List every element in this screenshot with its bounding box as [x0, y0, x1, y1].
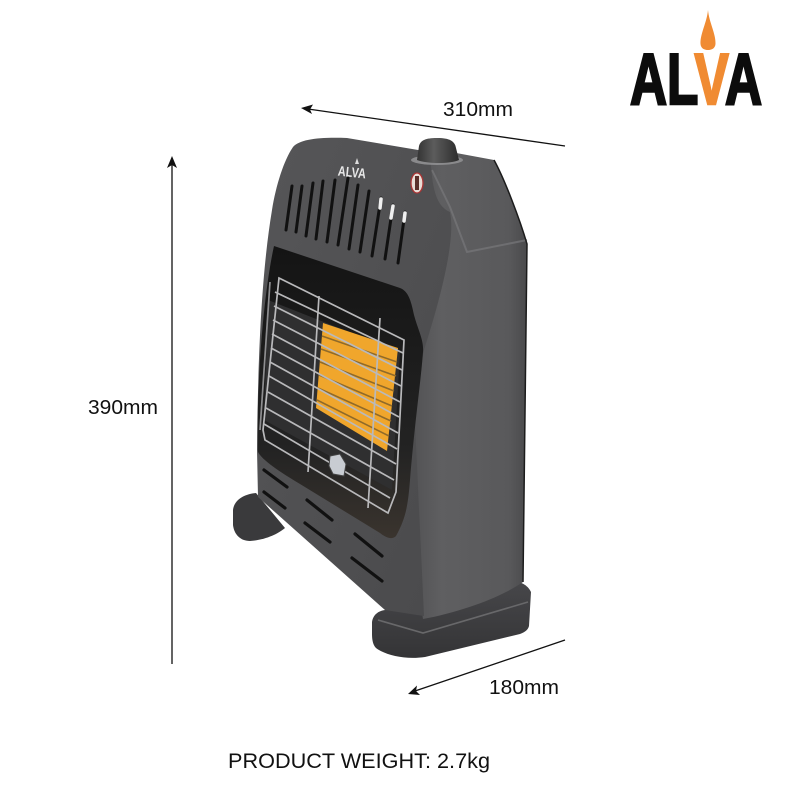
wire grill — [260, 278, 404, 513]
vent highlights — [380, 199, 405, 221]
side bevel highlight — [432, 170, 527, 252]
grill frame — [263, 278, 404, 513]
depth dimension arrow — [408, 640, 565, 695]
width label: 310mm — [443, 99, 513, 121]
width dimension arrow — [301, 104, 565, 146]
body front panel — [257, 138, 451, 616]
right foot base — [372, 581, 531, 658]
dark window frame — [258, 246, 423, 538]
burner fitting — [329, 454, 346, 476]
window inner reflection — [264, 300, 400, 490]
logo: ALVA — [630, 10, 762, 120]
logo wordmark: ALVA — [630, 40, 762, 120]
warning badge — [411, 173, 423, 193]
top logo: ALVA — [337, 163, 367, 181]
ceramic panel ribs — [317, 336, 397, 436]
height label: 390mm — [88, 397, 158, 419]
depth label: 180mm — [489, 677, 559, 699]
base highlight — [378, 602, 528, 633]
body side panel — [405, 150, 527, 619]
product weight: PRODUCT WEIGHT: 2.7kg — [228, 750, 490, 773]
right body edge — [494, 160, 527, 582]
left foot — [233, 493, 285, 541]
control knob — [417, 138, 459, 163]
knob recess — [411, 155, 463, 165]
heater illustration — [233, 138, 531, 658]
top logo — [337, 158, 367, 181]
orange ceramic panel — [316, 323, 398, 451]
logo flame — [700, 10, 716, 50]
height dimension arrow — [167, 156, 177, 664]
top vents — [286, 178, 405, 263]
lower vents — [264, 470, 382, 581]
